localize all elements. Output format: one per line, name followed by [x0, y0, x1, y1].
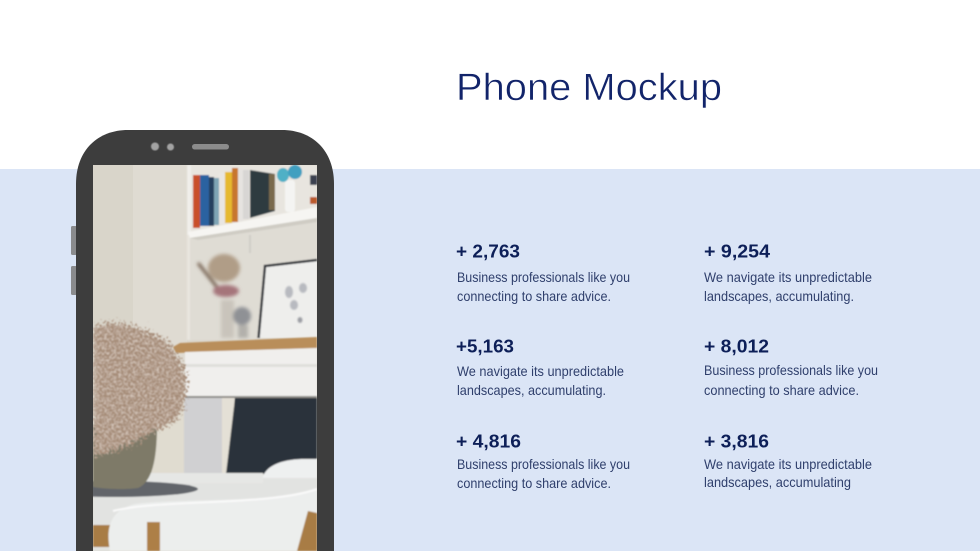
stat: 8,012: Business professionals like you [704, 362, 878, 378]
stat: 2,763 [456, 240, 630, 304]
white chair back [108, 489, 317, 551]
sketch in frame [285, 283, 307, 323]
stat: 3,816: landscapes, accumulating [704, 474, 851, 490]
stat: 5,163: landscapes, accumulating. [457, 382, 606, 398]
background band [0, 169, 980, 551]
wall [93, 165, 317, 551]
stat: 3,816: + 3,816 [704, 430, 769, 452]
stat: 4,816 [456, 430, 630, 491]
alcove [187, 165, 317, 340]
stat: 4,816: connecting to share advice. [457, 475, 611, 491]
stat: 3,816 [704, 430, 872, 490]
blue flower vase [277, 165, 302, 212]
stat: 3,816: We navigate its unpredictable [704, 456, 872, 472]
side buttons [71, 226, 77, 295]
screen photo [93, 165, 317, 551]
wooden chair legs [93, 525, 111, 547]
stat: 8,012: + 8,012 [704, 336, 769, 356]
books [193, 168, 275, 228]
stat: 2,763: + 2,763 [456, 240, 520, 262]
stat: 8,012: connecting to share advice. [704, 382, 859, 398]
title: Phone Mockup [456, 67, 722, 109]
phone mockup [71, 130, 334, 551]
table [93, 478, 317, 551]
phone body [76, 130, 334, 551]
shelf [188, 207, 317, 238]
mat [93, 480, 198, 498]
dried flowers vase [198, 254, 251, 338]
stat: 8,012 [704, 336, 878, 398]
pot [93, 425, 157, 489]
stat: 5,163 [456, 336, 624, 398]
mantel [93, 336, 317, 551]
stat: 2,763: connecting to share advice. [457, 288, 611, 304]
stat: 9,254: + 9,254 [704, 240, 771, 262]
speaker [192, 144, 229, 150]
stat: 9,254 [704, 240, 872, 304]
stat: 2,763: Business professionals like you [457, 269, 630, 285]
camera dots [151, 142, 174, 150]
fireplace surround [184, 398, 222, 472]
stat: 9,254: We navigate its unpredictable [704, 269, 872, 285]
picture frame [258, 259, 317, 338]
stat: 5,163: +5,163 [456, 336, 514, 356]
chair behind [263, 459, 317, 482]
dried plant [93, 323, 186, 456]
stat: 4,816: + 4,816 [456, 430, 521, 452]
small books right [310, 175, 317, 204]
stat: 5,163: We navigate its unpredictable [457, 363, 624, 379]
stat: 4,816: Business professionals like you [457, 456, 630, 472]
shelf bracket [249, 235, 251, 253]
dark fireplace [226, 398, 317, 474]
stat: 9,254: landscapes, accumulating. [704, 288, 854, 304]
